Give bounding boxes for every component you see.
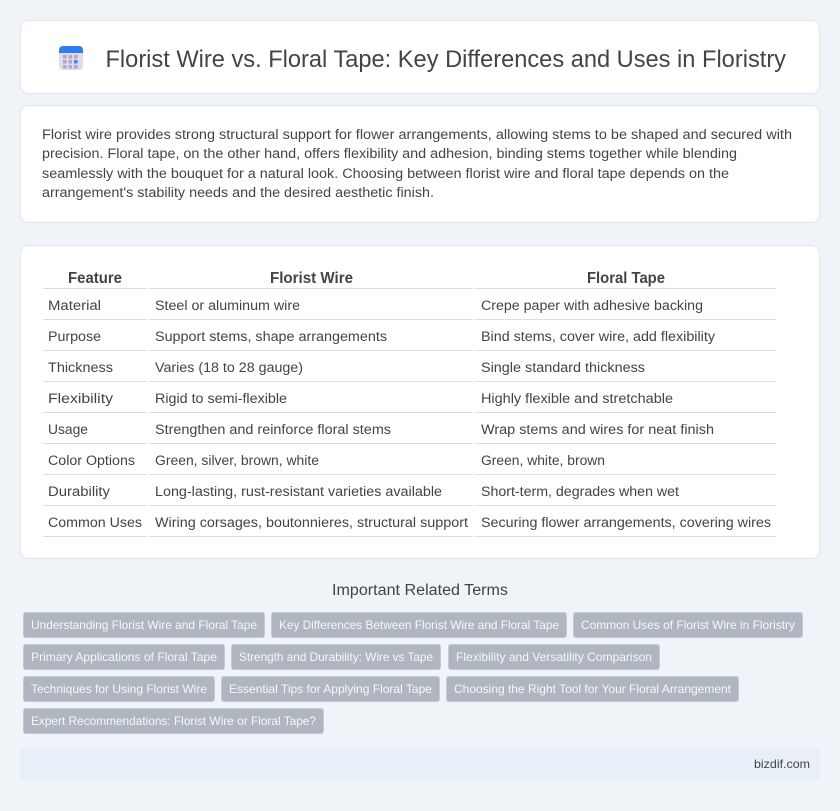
row: usage: Strengthen and reinforce floral stems — [155, 422, 391, 438]
chip — [24, 676, 214, 702]
title: Florist Wire vs. Floral Tape: Key Differences and Uses in Floristry — [106, 46, 786, 73]
row: durability: Long-lasting, rust-resistant varieties available — [155, 484, 442, 500]
chip — [574, 612, 802, 638]
icon: calendar — [59, 46, 83, 70]
row: durability — [48, 484, 679, 500]
row: color options: Green, white, brown — [481, 453, 605, 469]
row: purpose: Purpose — [48, 329, 101, 345]
row: thickness: Varies (18 to 28 gauge) — [155, 360, 303, 376]
row: common uses: Wiring corsages, boutonnieres, structural support — [155, 515, 468, 531]
row: material: Material — [48, 298, 101, 314]
row: common uses — [48, 515, 771, 531]
row: flexibility — [48, 391, 673, 407]
chip: Strength and Durability: Wire vs Tape — [239, 650, 433, 664]
table header: Floral Tape — [587, 270, 665, 287]
row: purpose: Support stems, shape arrangements — [155, 329, 387, 345]
row: usage: Wrap stems and wires for neat finish — [481, 422, 714, 438]
row: material: Crepe paper with adhesive backing — [481, 298, 703, 314]
chip — [232, 644, 440, 670]
title panel — [20, 20, 820, 94]
text block: intro: arrangement's stability needs and the desired aesthetic finish. — [42, 185, 434, 201]
table header: Florist Wire — [270, 270, 353, 287]
row: usage — [48, 422, 714, 438]
row: color options: Color Options — [48, 453, 135, 469]
chip: Techniques for Using Florist Wire — [31, 682, 207, 696]
chip: Understanding Florist Wire and Floral Tape — [31, 618, 257, 632]
panel: comparison table — [20, 246, 820, 558]
panel: intro paragraph — [20, 106, 820, 222]
row: usage: Usage — [48, 422, 88, 438]
text block: intro — [42, 127, 792, 201]
chip — [446, 676, 738, 702]
row: durability: Short-term, degrades when wet — [481, 484, 679, 500]
chip: Key Differences Between Florist Wire and Floral Tape — [279, 618, 559, 632]
chip: Essential Tips for Applying Floral Tape — [229, 682, 432, 696]
footer bar — [20, 747, 820, 781]
chip — [448, 644, 660, 670]
row: color options — [48, 453, 605, 469]
chip: Flexibility and Versatility Comparison — [456, 650, 652, 664]
table header — [68, 270, 665, 287]
row: material — [48, 298, 703, 314]
chip — [272, 612, 566, 638]
row: thickness: Single standard thickness — [481, 360, 645, 376]
row: thickness — [48, 360, 645, 376]
chip: Common Uses of Florist Wire in Floristry — [581, 618, 795, 632]
chip — [222, 676, 440, 702]
footer source: bizdif.com — [754, 757, 810, 771]
chip — [24, 644, 224, 670]
row: flexibility: Highly flexible and stretchable — [481, 391, 673, 407]
row: thickness: Thickness — [48, 360, 113, 376]
row: durability: Durability — [48, 484, 111, 500]
chip: Primary Applications of Floral Tape — [31, 650, 217, 664]
row: purpose: Bind stems, cover wire, add flexibility — [481, 329, 716, 345]
related term chips — [24, 612, 802, 734]
row: purpose — [48, 329, 716, 345]
row: common uses: Securing flower arrangements, covering wires — [481, 515, 771, 531]
text block: intro: precision. Floral tape, on the other hand, offers flexibility and adhesion, binding stems together while blending — [42, 146, 737, 162]
chip — [24, 612, 264, 638]
chip: Expert Recommendations: Florist Wire or Floral Tape? — [31, 714, 316, 728]
text block: intro: Florist wire provides strong structural support for flower arrangements, allowing stems to be shaped and secured with — [42, 127, 792, 143]
chip — [24, 708, 324, 734]
table header: Feature — [68, 270, 122, 287]
row: color options: Green, silver, brown, white — [155, 453, 319, 469]
chip: Choosing the Right Tool for Your Floral Arrangement — [454, 682, 732, 696]
text block: intro: seamlessly with the bouquet for a natural look. Choosing between florist wire and floral tape depends on the — [42, 166, 729, 182]
row: flexibility: Flexibility — [48, 391, 114, 407]
row: flexibility: Rigid to semi-flexible — [155, 391, 287, 407]
row: material: Steel or aluminum wire — [155, 298, 300, 314]
heading: important related terms: Important Related Terms — [332, 582, 508, 599]
row: common uses: Common Uses — [48, 515, 142, 531]
